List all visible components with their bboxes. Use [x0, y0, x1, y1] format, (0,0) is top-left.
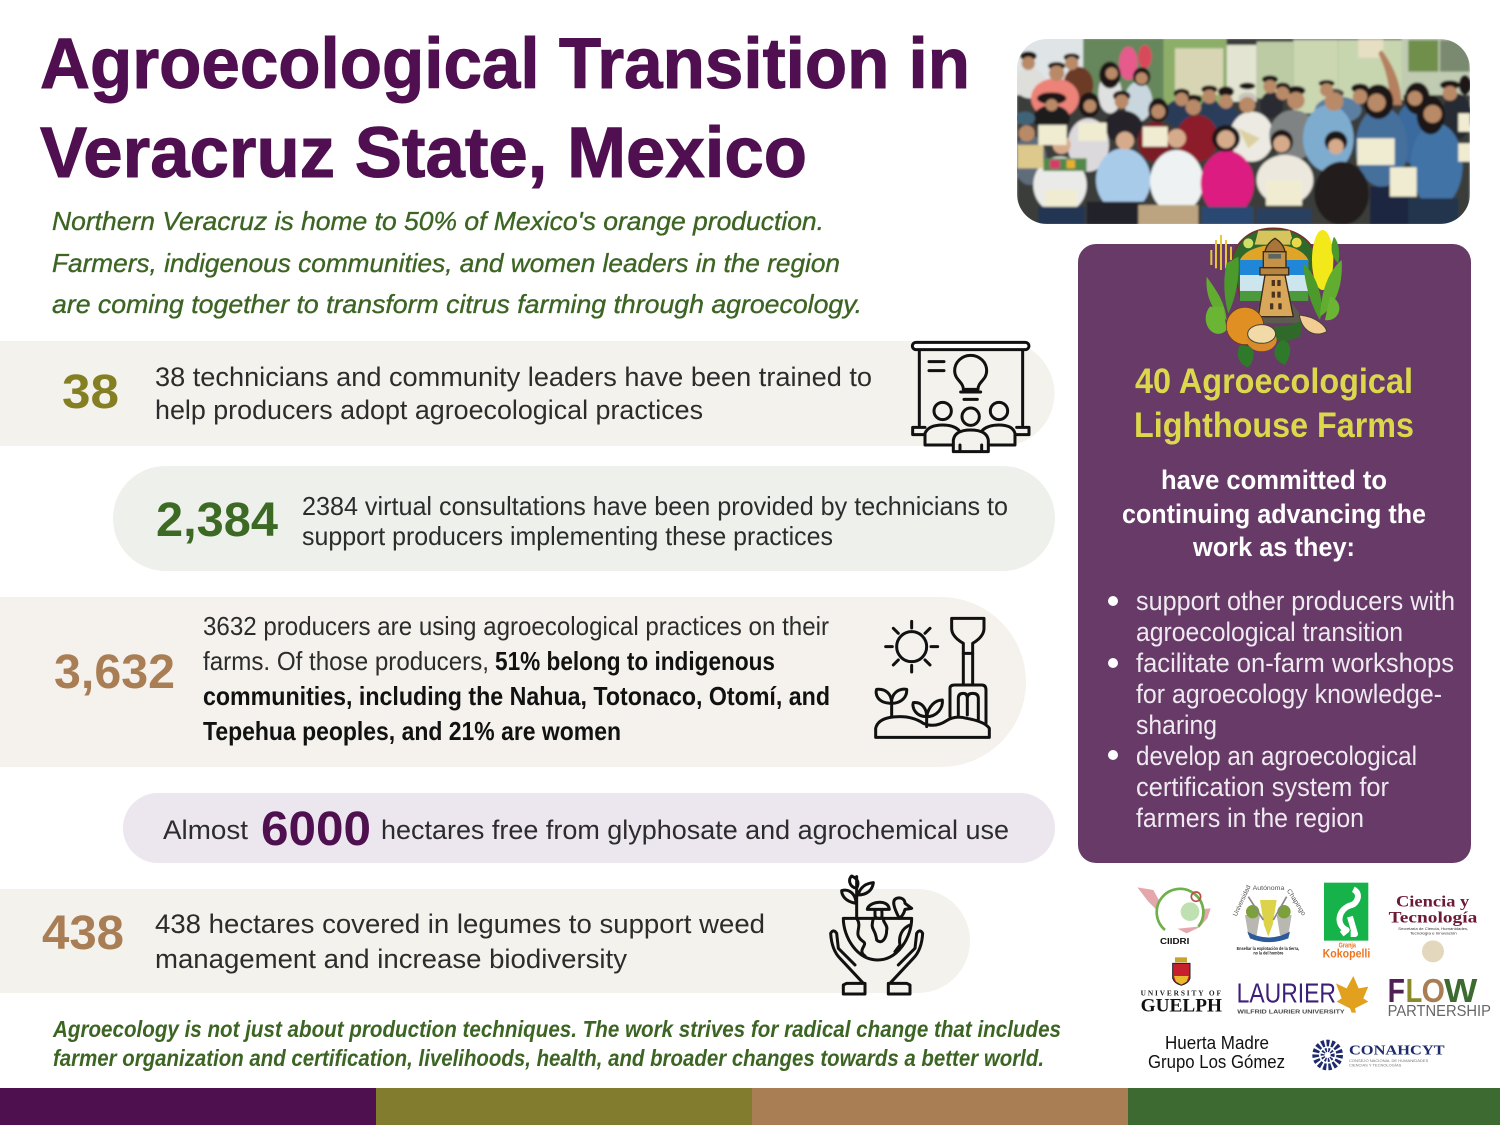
logo: CIIDRI — [1137, 887, 1211, 946]
logo: CONAHCYT: CONSEJO NACIONAL DE HUMANIDADES — [1349, 1059, 1429, 1063]
stat text — [203, 611, 830, 746]
stat text: farms. Of those producers, — [203, 646, 489, 676]
logo: Granja Kokopelli — [1323, 883, 1370, 960]
stat text with number 6000 — [163, 803, 1009, 856]
logo: Laurier: WILFRID LAURIER UNIVERSITY — [1237, 1010, 1345, 1016]
logo: Universidad Autonoma Chapingo: Chapingo — [1285, 888, 1307, 917]
logo: Ciencia y Tecnologia: Tecnología — [1389, 910, 1477, 927]
logo: University of Guelph: GUELPH — [1141, 995, 1222, 1016]
stat number 38: 38 — [62, 366, 119, 419]
stat text with number 6000: Almost — [163, 815, 248, 845]
icon: lighthouse farms emblem — [1206, 228, 1342, 367]
stat number 3,632: 3,632 — [54, 646, 175, 699]
logo text: Huerta Madre, Grupo Los Gomez: Grupo Los Gómez — [1148, 1052, 1285, 1072]
icon: sun, sprouts and garden fork — [876, 618, 989, 737]
back row bodies — [1014, 68, 1046, 98]
stat text — [155, 909, 765, 974]
logo text: Huerta Madre, Grupo Los Gomez: Huerta Madre — [1165, 1033, 1269, 1053]
intro text: Northern Veracruz is home to 50% of Mexico's orange production. — [52, 206, 824, 236]
logo: CONAHCYT: CIENCIAS Y TECNOLOGÍAS — [1349, 1063, 1402, 1067]
logo: University of Guelph: UNIVERSITY OF — [1141, 988, 1222, 997]
logo: FLOW Partnership: L — [1406, 973, 1422, 1010]
bottom colour band — [0, 1088, 1500, 1125]
panel subheading — [1122, 465, 1426, 562]
logo: FLOW Partnership: W — [1444, 973, 1478, 1010]
stat text: help producers adopt agroecological practices — [155, 395, 703, 425]
photo: group of participants with certificates — [1013, 38, 1472, 225]
panel heading: Lighthouse Farms — [1134, 406, 1414, 445]
front row bodies — [1033, 157, 1087, 213]
panel bullet list: certification system for — [1136, 772, 1389, 802]
title: Agroecological Transition in — [40, 25, 970, 104]
stat 5 pill: legumes — [0, 876, 970, 994]
intro text — [52, 206, 862, 319]
panel: lighthouse farms — [1078, 244, 1471, 863]
partner logos — [1137, 883, 1491, 1072]
panel subheading: have committed to — [1161, 465, 1387, 495]
panel bullet list: support other producers with — [1136, 586, 1455, 616]
logo: Ciencia y Tecnologia — [1389, 894, 1477, 962]
closing statement — [52, 1016, 1061, 1071]
panel heading — [1134, 362, 1414, 445]
logo: CONAHCYT: CONAHCYT — [1349, 1043, 1445, 1058]
stat text: management and increase biodiversity — [155, 944, 628, 974]
logo: CIIDRI: CIIDRI — [1160, 937, 1189, 946]
stat 4 pill: glyphosate free hectares — [123, 793, 1055, 863]
stat text: 51% belong to indigenous — [495, 646, 775, 676]
logo text: Huerta Madre, Grupo Los Gomez — [1148, 1033, 1285, 1072]
panel bullet list: sharing — [1136, 710, 1217, 740]
stat text: communities, including the Nahua, Totonaco, Otomí, and — [203, 681, 830, 711]
stat text with number 6000: 6000 — [261, 803, 371, 856]
stat text: support producers implementing these practices — [302, 521, 833, 551]
logo: Ciencia y Tecnologia: Tecnología e Innovación — [1410, 932, 1457, 936]
panel bullet list: facilitate on-farm workshops — [1136, 648, 1454, 678]
logo: Universidad Autonoma Chapingo: Autónoma — [1253, 885, 1285, 892]
closing statement: Agroecology is not just about production techniques. The work strives for radical change that includes — [52, 1016, 1061, 1042]
stat text: 2384 virtual consultations have been provided by technicians to — [302, 491, 1008, 521]
logo: University of Guelph — [1141, 957, 1222, 1016]
logo: Universidad Autonoma Chapingo: Enseñar la explotación de la tierra, — [1237, 946, 1299, 951]
stat text — [302, 491, 1008, 551]
stat number 438: 438 — [42, 907, 124, 960]
panel bullet list — [1108, 586, 1455, 833]
logo: Granja Kokopelli: Granja — [1339, 940, 1357, 949]
stat text: 438 hectares covered in legumes to support weed — [155, 909, 765, 939]
stat text: 3632 producers are using agroecological practices on their — [203, 611, 829, 641]
logo: FLOW Partnership: PARTNERSHIP — [1388, 1003, 1491, 1020]
stat 2 pill: virtual consultations — [113, 466, 1055, 571]
logo: Ciencia y Tecnologia: Secretaría de Ciencia, Humanidades, — [1398, 927, 1468, 931]
faces — [1053, 129, 1344, 154]
logo: Granja Kokopelli: Kokopelli — [1323, 946, 1370, 960]
logo: Universidad Autonoma Chapingo — [1232, 884, 1307, 956]
logo: FLOW Partnership: O — [1422, 973, 1445, 1010]
middle row bodies — [1104, 111, 1143, 143]
intro text: Farmers, indigenous communities, and women leaders in the region — [52, 248, 840, 278]
panel subheading: continuing advancing the — [1122, 499, 1426, 529]
stat 3 pill: producers — [0, 597, 1026, 767]
stat text: Tepehua peoples, and 21% are women — [203, 716, 621, 746]
panel bullet list: develop an agroecological — [1136, 741, 1417, 771]
panel bullet list: farmers in the region — [1136, 803, 1364, 833]
logo: FLOW Partnership: F — [1388, 973, 1405, 1010]
stat text: 38 technicians and community leaders have been trained to — [155, 362, 872, 392]
panel subheading: work as they: — [1192, 532, 1355, 562]
panel heading: 40 Agroecological — [1135, 362, 1413, 401]
stat text — [155, 362, 872, 425]
logo: Laurier: LAURIER — [1237, 977, 1336, 1008]
logo: CONAHCYT — [1316, 1043, 1445, 1067]
title: Veracruz State, Mexico — [40, 114, 807, 193]
logo: Ciencia y Tecnologia: Ciencia y — [1396, 894, 1469, 911]
logo: Universidad Autonoma Chapingo: Universidad — [1232, 884, 1253, 918]
stat 1 pill: technicians trained — [0, 341, 1054, 452]
intro text: are coming together to transform citrus farming through agroecology. — [52, 289, 862, 319]
logo: FLOW Partnership — [1388, 973, 1491, 1020]
panel bullet list: for agroecology knowledge- — [1136, 679, 1442, 709]
title — [40, 25, 970, 193]
logo: Universidad Autonoma Chapingo: no la del hombre — [1253, 951, 1284, 956]
icon: training with light bulb — [912, 342, 1029, 452]
stat text with number 6000: hectares free from glyphosate and agrochemical use — [381, 815, 1009, 845]
hair — [1020, 51, 1471, 154]
icon: hands holding earth, plant, mushroom and bird — [831, 876, 923, 994]
closing statement: farmer organization and certification, livelihoods, health, and broader changes towards a better world. — [53, 1045, 1044, 1071]
panel bullet list: agroecological transition — [1136, 617, 1403, 647]
stat number 2,384: 2,384 — [156, 494, 278, 547]
